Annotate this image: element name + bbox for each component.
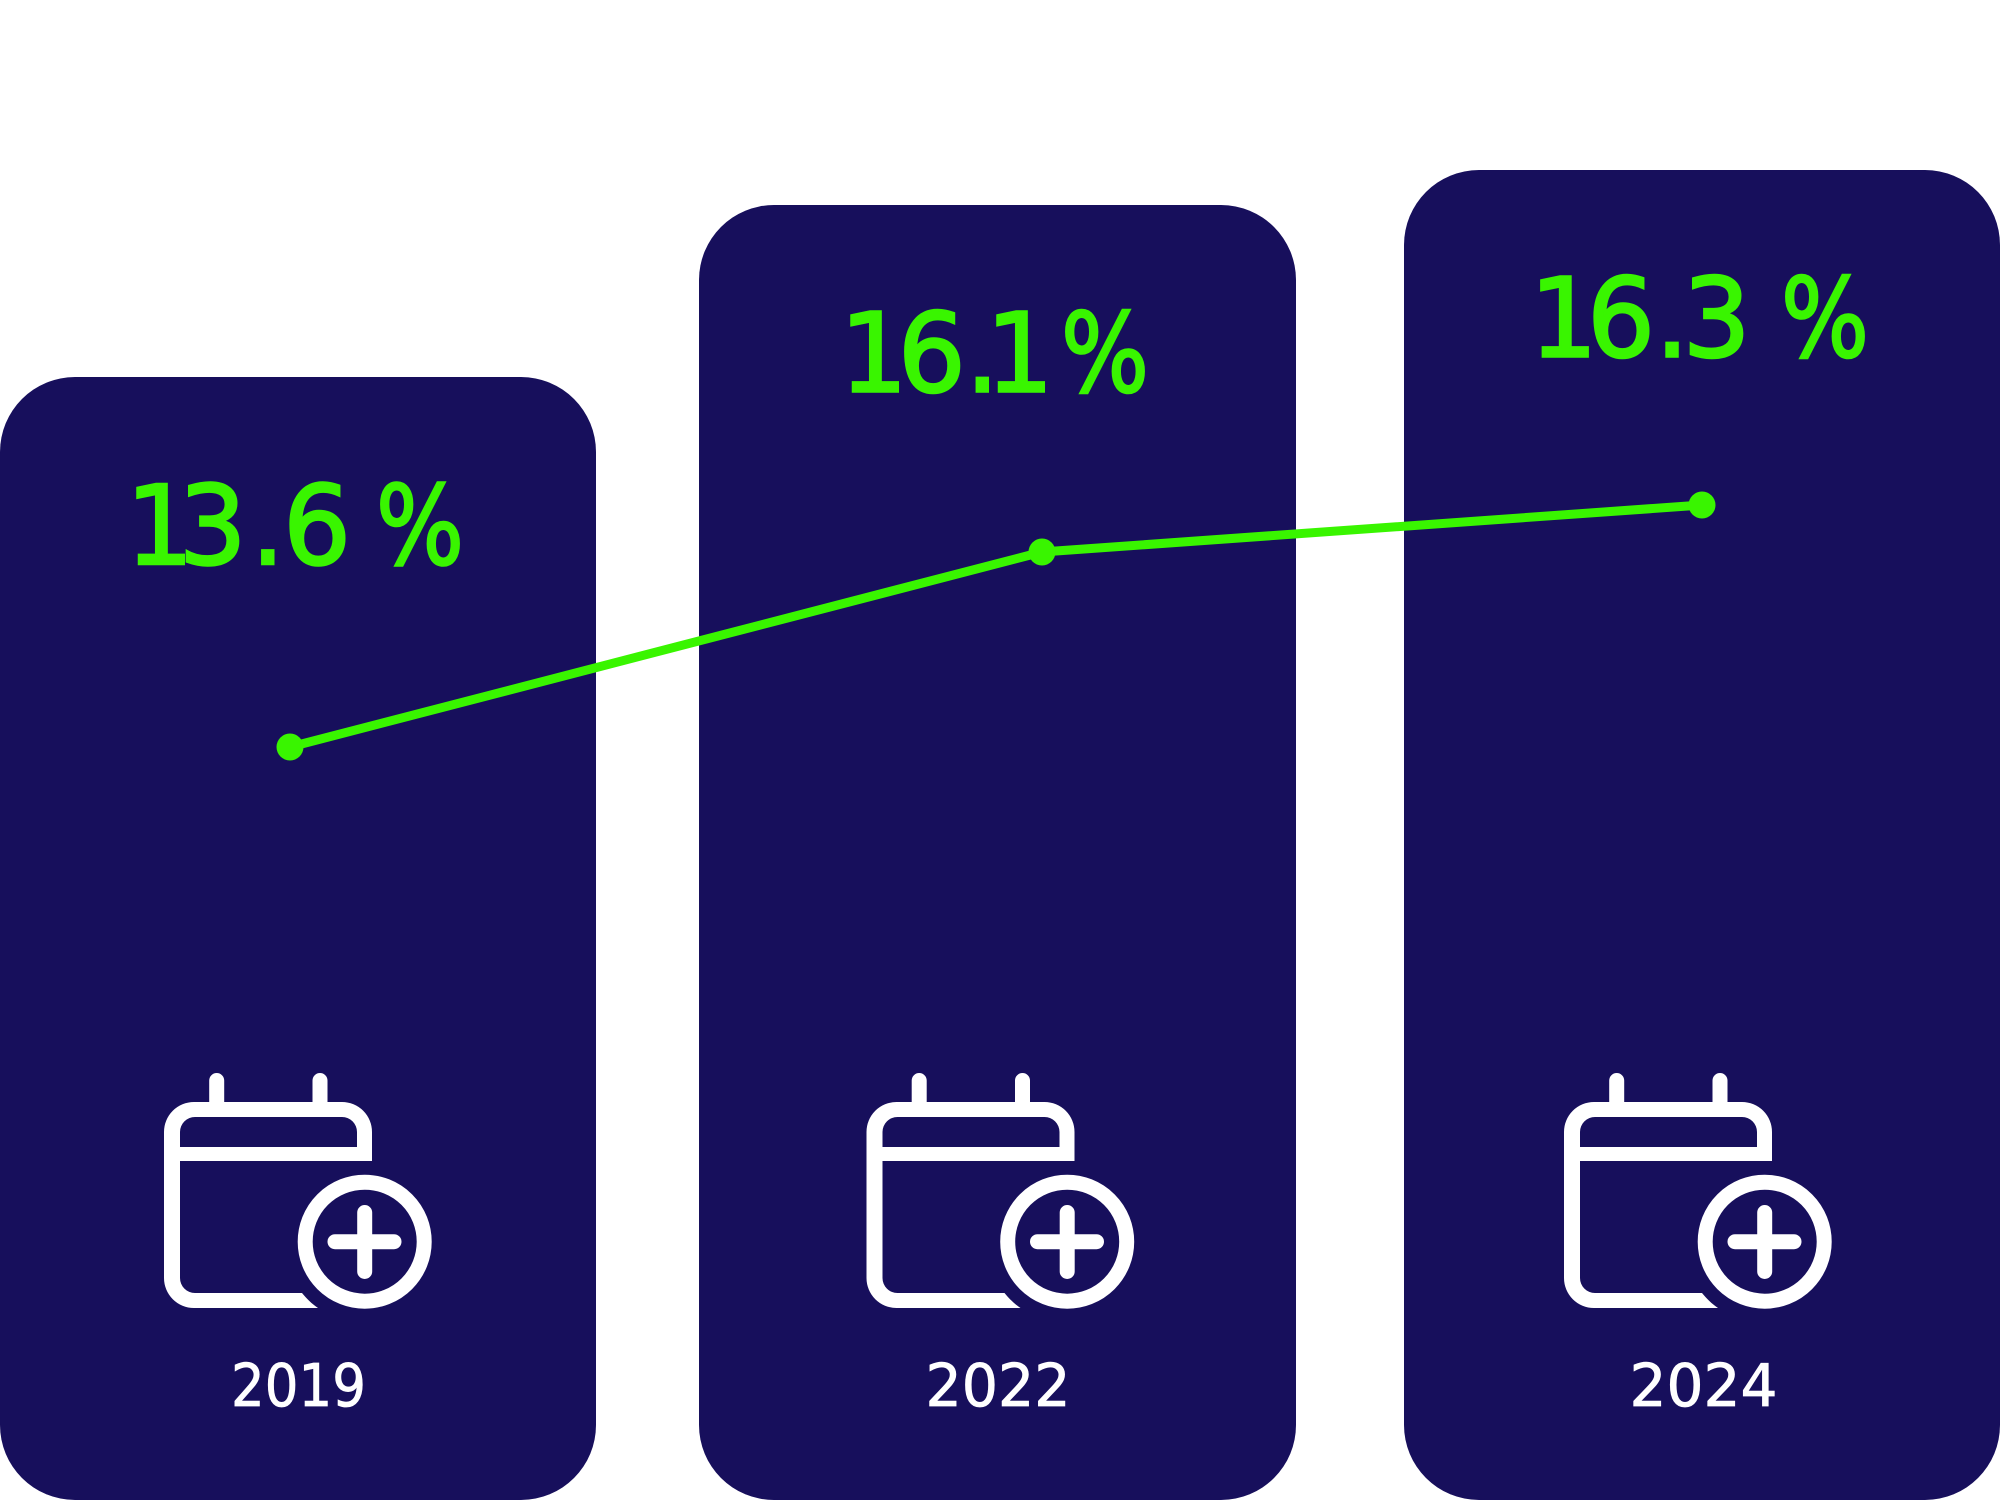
value: 16.1 %: 16.1 [840, 289, 1054, 418]
value: 16.1 %: % [1061, 290, 1149, 418]
value: 16.3 %: % [1781, 255, 1869, 383]
value: 16.3 %: 16.3 [1530, 254, 1751, 383]
value: 13.6 % [126, 461, 464, 590]
label: 2022: 2022 [926, 1351, 1070, 1420]
value: 13.6 %: 13.6 [126, 461, 351, 590]
value: 16.1 % [840, 289, 1149, 418]
panel: 2022 bar [699, 205, 1296, 1500]
icon: calendar plus 2019 [164, 1080, 424, 1308]
label: 2024: 2024 [1630, 1351, 1778, 1420]
value: 16.3 % [1530, 254, 1869, 383]
icon: calendar plus 2022 [866, 1080, 1127, 1308]
label: 2019: 2019 [231, 1351, 366, 1420]
panel: 2019 bar [0, 377, 596, 1500]
icon: calendar plus 2024 [1564, 1080, 1824, 1308]
panel: 2024 bar [1404, 170, 2000, 1500]
line chart: trend across years [276, 492, 1716, 760]
value: 13.6 %: % [376, 462, 464, 590]
